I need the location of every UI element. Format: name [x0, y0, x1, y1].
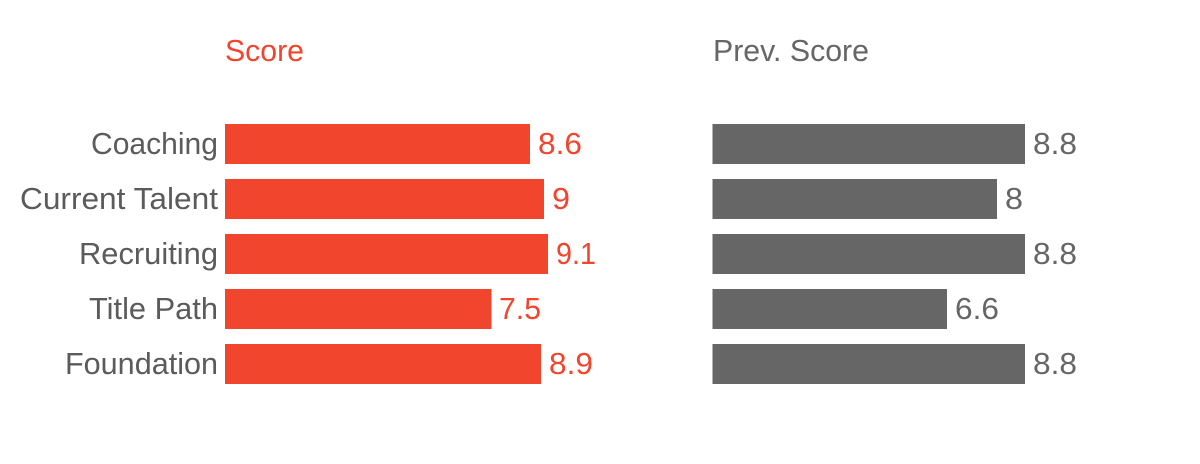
panel: previous score bars: [712, 124, 1077, 384]
bar: Title Path 7.5: [225, 289, 492, 329]
label: Recruiting: Recruiting: [79, 236, 218, 271]
panel: score bars: [225, 124, 596, 384]
value: 8: 8: [1005, 181, 1023, 216]
bar: Current Talent 8: [712, 179, 997, 219]
value: 8.6: 8.6: [538, 126, 582, 161]
value: 8.8: 8.8: [1033, 126, 1077, 161]
value: 8.9: 8.9: [549, 346, 593, 381]
value: 8.8: 8.8: [1033, 236, 1077, 271]
heading: Prev. Score: Prev. Score: [713, 33, 869, 68]
label: Coaching: Coaching: [91, 126, 218, 161]
bar: Coaching 8.8: [712, 124, 1025, 164]
bar: Coaching 8.6: [225, 124, 530, 164]
value: 6.6: 6.6: [955, 291, 999, 326]
bar: Foundation 8.8: [712, 344, 1025, 384]
label: Current Talent: Current Talent: [20, 181, 218, 216]
bar: Foundation 8.9: [225, 344, 541, 384]
bar: Current Talent 9: [225, 179, 544, 219]
value: 8.8: 8.8: [1033, 346, 1077, 381]
bar: Recruiting 9.1: [225, 234, 548, 274]
bar: Title Path 6.6: [712, 289, 947, 329]
value: 7.5: 7.5: [499, 291, 541, 326]
value: 9.1: 9.1: [556, 236, 596, 271]
label: Title Path: Title Path: [89, 291, 218, 326]
heading: Score: Score: [225, 33, 304, 68]
bar: Recruiting 8.8: [712, 234, 1025, 274]
label: Foundation: Foundation: [65, 346, 218, 381]
value: 9: 9: [552, 181, 570, 216]
row labels: [20, 126, 218, 381]
